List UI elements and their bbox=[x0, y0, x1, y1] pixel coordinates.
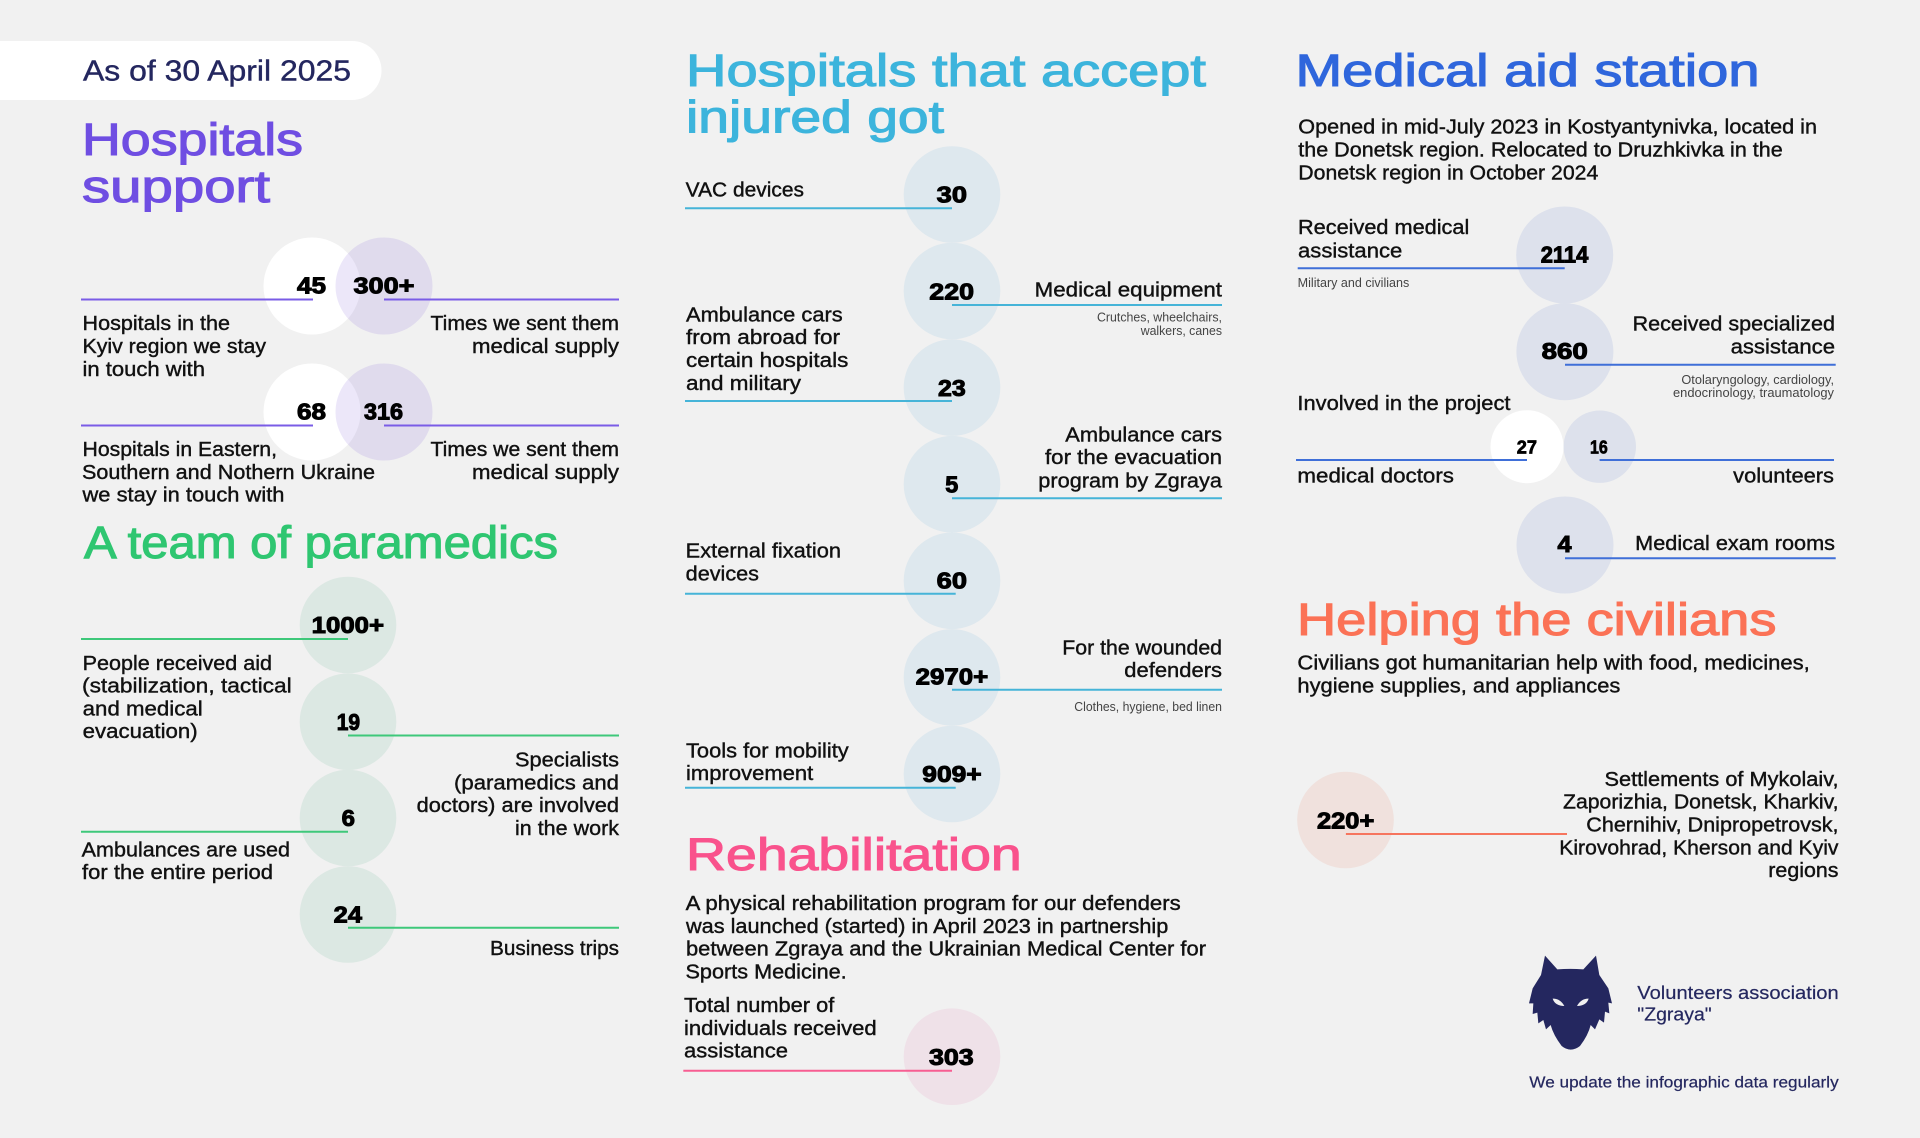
stat pair: 45 hospitals and 300+ supplies: Hospitals in the bbox=[82, 312, 230, 335]
stat: 2114 received medical assistance: Received medical bbox=[1298, 216, 1469, 239]
panel: team of paramedics bbox=[81, 517, 620, 963]
stat: 4 medical exam rooms: Medical exam rooms bbox=[1635, 532, 1835, 555]
stat: 19 specialists: in the work bbox=[515, 817, 620, 840]
stat: 909+ tools for mobility: 909+ bbox=[922, 761, 982, 787]
stat: 19 specialists bbox=[300, 673, 620, 840]
stat: 220+ settlements: Kirovohrad, Kherson and Kyiv bbox=[1559, 836, 1839, 859]
stat: 23 ambulance cars from abroad: certain hospitals bbox=[686, 349, 848, 372]
stat: 24 business trips: 24 bbox=[334, 902, 362, 928]
stat pair: 27 medical doctors and 16 volunteers: volunteers bbox=[1733, 465, 1834, 488]
heading: helping the civilians: Helping the civilians bbox=[1297, 594, 1776, 645]
stat pair: 68 hospitals and 316 supplies: 316 bbox=[364, 398, 403, 424]
stat: 1000+ people: People received aid bbox=[83, 652, 272, 675]
text: organization name: "Zgraya" bbox=[1637, 1004, 1712, 1025]
text: organization name bbox=[1637, 982, 1839, 1025]
stat: 860 received specialized assistance: Otolaryngology, cardiology, bbox=[1681, 373, 1834, 387]
heading: hospitals that accept injured got bbox=[686, 45, 1207, 143]
stat: 6 ambulances: Ambulances are used bbox=[82, 839, 290, 862]
heading: medical aid station: Medical aid station bbox=[1296, 45, 1760, 96]
panel: hospitals that accept injured bbox=[685, 45, 1223, 822]
paragraph: station description: Opened in mid-July 2023 in Kostyantynivka, located in bbox=[1298, 115, 1817, 138]
paragraph: rehabilitation program: was launched (started) in April 2023 in partnership bbox=[685, 915, 1168, 938]
panel: rehabilitation bbox=[683, 829, 1206, 1105]
stat pair: 68 hospitals and 316 supplies: Southern and Nothern Ukraine bbox=[82, 461, 375, 484]
stat pair: 45 hospitals and 300+ supplies: medical supply bbox=[472, 335, 620, 358]
icon: wolf logo bbox=[1529, 956, 1612, 1050]
stat: 220 medical equipment: walkers, canes bbox=[1140, 324, 1222, 338]
stat pair: 27 medical doctors and 16 volunteers: 16 bbox=[1590, 437, 1608, 457]
stat: 909+ tools for mobility: Tools for mobility bbox=[686, 739, 849, 762]
text: organization name: Volunteers association bbox=[1637, 982, 1839, 1003]
stat: 23 ambulance cars from abroad: from abroad for bbox=[686, 326, 840, 349]
stat: 23 ambulance cars from abroad: and military bbox=[686, 372, 802, 395]
panel: helping the civilians bbox=[1297, 594, 1839, 882]
stat: 60 external fixation devices bbox=[685, 532, 1000, 629]
stat: 220 medical equipment: 220 bbox=[929, 278, 974, 304]
stat pair: 68 hospitals and 316 supplies: Times we sent them bbox=[430, 438, 619, 461]
stat: 5 ambulance cars for evacuation: for the evacuation bbox=[1045, 446, 1222, 469]
stat: 220+ settlements bbox=[1297, 768, 1839, 882]
stat: 220+ settlements: Zaporizhia, Donetsk, Kharkiv, bbox=[1563, 791, 1838, 814]
stat: 2970+ for the wounded defenders: 2970+ bbox=[916, 664, 988, 690]
paragraph: humanitarian help: Civilians got humanitarian help with food, medicines, bbox=[1297, 651, 1810, 674]
stat: 2114 received medical assistance: Military and civilians bbox=[1298, 276, 1409, 290]
stat: 6 ambulances: 6 bbox=[342, 805, 355, 831]
paragraph: station description bbox=[1298, 115, 1817, 185]
stat: 24 business trips: Business trips bbox=[490, 937, 619, 960]
stat pair: 45 hospitals and 300+ supplies: Kyiv region we stay bbox=[82, 335, 267, 358]
stat: 23 ambulance cars from abroad bbox=[685, 304, 1000, 436]
paragraph: rehabilitation program bbox=[685, 892, 1206, 983]
stat: 860 received specialized assistance: 860 bbox=[1542, 338, 1588, 364]
stat: 1000+ people: 1000+ bbox=[312, 612, 384, 638]
paragraph: rehabilitation program: A physical rehabilitation program for our defenders bbox=[686, 892, 1181, 915]
stat pair: 68 hospitals and 316 supplies bbox=[81, 364, 620, 506]
stat pair: 27 medical doctors and 16 volunteers: medical doctors bbox=[1297, 465, 1454, 488]
stat: 860 received specialized assistance bbox=[1516, 303, 1836, 400]
stat: 2970+ for the wounded defenders: Clothes, hygiene, bed linen bbox=[1074, 700, 1222, 714]
stat: 860 received specialized assistance: endocrinology, traumatology bbox=[1673, 386, 1835, 400]
stat: 6 ambulances: for the entire period bbox=[82, 861, 273, 884]
stat: 5 ambulance cars for evacuation: 5 bbox=[945, 472, 959, 498]
stat: 6 ambulances bbox=[81, 770, 396, 884]
stat pair: 27 medical doctors and 16 volunteers bbox=[1296, 392, 1834, 488]
paragraph: rehabilitation program: Sports Medicine. bbox=[686, 960, 847, 983]
stat: 24 business trips bbox=[300, 866, 619, 963]
stat: 60 external fixation devices: External fixation bbox=[686, 540, 841, 563]
stat: 909+ tools for mobility: improvement bbox=[686, 762, 814, 785]
text: update note: We update the infographic data regularly bbox=[1529, 1075, 1839, 1092]
heading: hospitals that accept injured got: Hospitals that accept bbox=[686, 45, 1207, 96]
stat: 2970+ for the wounded defenders bbox=[904, 629, 1222, 726]
stat: 2114 received medical assistance: 2114 bbox=[1541, 242, 1588, 268]
stat: 60 external fixation devices: devices bbox=[686, 562, 759, 585]
stat pair: 45 hospitals and 300+ supplies: in touch with bbox=[82, 358, 205, 381]
stat: 19 specialists: Specialists bbox=[515, 749, 619, 772]
heading: hospitals support bbox=[82, 114, 303, 212]
stat: 23 ambulance cars from abroad: Ambulance cars bbox=[686, 304, 843, 327]
stat: 303 individuals: assistance bbox=[684, 1040, 788, 1063]
heading: hospitals support: support bbox=[82, 161, 271, 212]
stat: 19 specialists: (paramedics and bbox=[454, 771, 619, 794]
stat: 909+ tools for mobility bbox=[685, 726, 1000, 822]
stat: 303 individuals: individuals received bbox=[684, 1017, 877, 1040]
stat: 2970+ for the wounded defenders: For the wounded bbox=[1062, 636, 1222, 659]
panel: medical aid station bbox=[1296, 45, 1836, 594]
stat: 4 medical exam rooms bbox=[1516, 496, 1836, 594]
stat: 19 specialists: 19 bbox=[337, 709, 360, 735]
stat: 1000+ people: evacuation) bbox=[83, 720, 198, 743]
stat: 860 received specialized assistance: Received specialized bbox=[1633, 313, 1835, 336]
stat: 220+ settlements: Chernihiv, Dnipropetrovsk, bbox=[1586, 814, 1838, 837]
stat: 1000+ people: and medical bbox=[83, 697, 203, 720]
date pill: As of 30 April 2025 bbox=[83, 56, 351, 88]
stat: 1000+ people: (stabilization, tactical bbox=[82, 675, 292, 698]
stat: 860 received specialized assistance: assistance bbox=[1731, 335, 1835, 358]
stat: 303 individuals bbox=[683, 994, 1000, 1105]
heading: rehabilitation: Rehabilitation bbox=[686, 829, 1022, 880]
paragraph: rehabilitation program: between Zgraya and the Ukrainian Medical Center for bbox=[686, 938, 1206, 961]
stat: 30 VAC devices: 30 bbox=[937, 182, 967, 208]
stat: 5 ambulance cars for evacuation: program by Zgraya bbox=[1038, 469, 1223, 492]
stat pair: 27 medical doctors and 16 volunteers: Involved in the project bbox=[1297, 392, 1511, 415]
stat pair: 45 hospitals and 300+ supplies: 300+ bbox=[354, 272, 414, 298]
stat: 2970+ for the wounded defenders: defenders bbox=[1124, 659, 1222, 682]
paragraph: station description: Donetsk region in October 2024 bbox=[1298, 162, 1598, 185]
stat: 23 ambulance cars from abroad: 23 bbox=[938, 375, 966, 401]
stat: 303 individuals: 303 bbox=[929, 1044, 974, 1070]
stat: 303 individuals: Total number of bbox=[684, 994, 835, 1017]
heading: team of paramedics: A team of paramedics bbox=[84, 517, 558, 568]
stat: 220 medical equipment: Medical equipment bbox=[1035, 279, 1222, 302]
stat: 220 medical equipment bbox=[904, 243, 1222, 339]
stat pair: 68 hospitals and 316 supplies: Hospitals in Eastern, bbox=[82, 438, 277, 461]
stat pair: 68 hospitals and 316 supplies: 68 bbox=[297, 398, 326, 424]
stat pair: 68 hospitals and 316 supplies: we stay in touch with bbox=[81, 484, 284, 506]
stat pair: 45 hospitals and 300+ supplies: 45 bbox=[297, 272, 326, 298]
heading: hospitals support: Hospitals bbox=[82, 114, 303, 165]
stat: 60 external fixation devices: 60 bbox=[937, 567, 967, 593]
stat: 19 specialists: doctors) are involved bbox=[417, 794, 619, 817]
heading: hospitals that accept injured got: injured got bbox=[686, 92, 945, 143]
stat: 220 medical equipment: Crutches, wheelchairs, bbox=[1097, 311, 1222, 325]
stat: 30 VAC devices: VAC devices bbox=[686, 179, 804, 202]
stat pair: 27 medical doctors and 16 volunteers: 27 bbox=[1517, 437, 1537, 457]
stat pair: 68 hospitals and 316 supplies: medical supply bbox=[472, 461, 620, 484]
stat: 2114 received medical assistance: assistance bbox=[1298, 239, 1402, 262]
paragraph: humanitarian help bbox=[1297, 651, 1810, 697]
stat: 220+ settlements: Settlements of Mykolaiv, bbox=[1604, 768, 1838, 791]
stat: 5 ambulance cars for evacuation bbox=[904, 423, 1223, 532]
paragraph: station description: the Donetsk region. Relocated to Druzhkivka in the bbox=[1298, 139, 1783, 162]
panel: hospitals support bbox=[81, 114, 620, 506]
stat pair: 45 hospitals and 300+ supplies bbox=[81, 238, 620, 381]
stat: 5 ambulance cars for evacuation: Ambulance cars bbox=[1065, 423, 1222, 446]
stat: 220+ settlements: 220+ bbox=[1317, 808, 1374, 834]
stat pair: 45 hospitals and 300+ supplies: Times we sent them bbox=[430, 312, 619, 335]
stat: 4 medical exam rooms: 4 bbox=[1558, 531, 1572, 557]
date pill bbox=[0, 41, 382, 100]
stat: 30 VAC devices bbox=[685, 146, 1000, 243]
paragraph: humanitarian help: hygiene supplies, and appliances bbox=[1297, 674, 1620, 697]
stat: 1000+ people bbox=[81, 577, 396, 743]
stat: 220+ settlements: regions bbox=[1768, 859, 1838, 882]
stat: 2114 received medical assistance bbox=[1298, 206, 1613, 304]
